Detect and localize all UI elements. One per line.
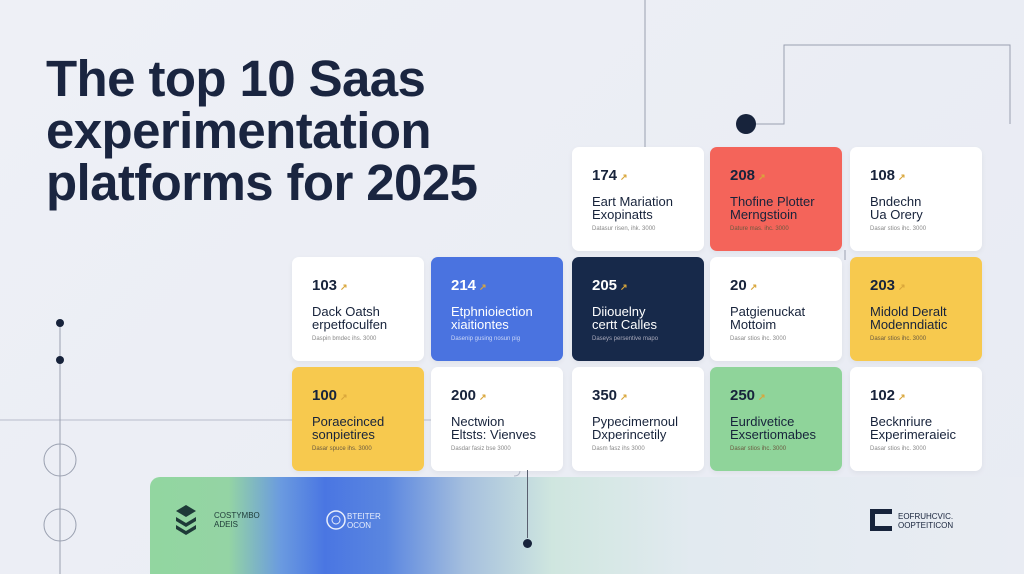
card 205: Diiouelny xyxy=(592,304,645,319)
card 102: 102 ↗ xyxy=(870,387,906,404)
card 200: Nectwion xyxy=(451,414,504,429)
card 100: 100 ↗ xyxy=(312,387,348,404)
card 20: Mottoim xyxy=(730,317,776,332)
card 350 xyxy=(572,367,704,471)
logo 1: ADEIS xyxy=(214,520,238,529)
connector dot xyxy=(527,470,528,538)
logo 1 xyxy=(176,505,260,535)
card 205: certt Calles xyxy=(592,317,657,332)
card 100: Dasar spuce ihs. 3000 xyxy=(312,446,372,452)
logo 2: BTEITER xyxy=(347,512,381,521)
card 108: Bndechn xyxy=(870,194,921,209)
card 250: 250 ↗ xyxy=(730,387,766,404)
card 103: Dack Oatsh xyxy=(312,304,380,319)
card 103 xyxy=(292,257,424,361)
card 102 xyxy=(850,367,982,471)
card 350: Dxperincetily xyxy=(592,427,666,442)
card 108: Ua Orery xyxy=(870,207,923,222)
card 205 xyxy=(572,257,704,361)
title: The top 10 Saas xyxy=(46,50,425,107)
logo 2 xyxy=(326,510,381,530)
card 102: Becknriure xyxy=(870,414,932,429)
card 250: Eurdivetice xyxy=(730,414,794,429)
logo 2: OCON xyxy=(347,521,371,530)
card 250 xyxy=(710,367,842,471)
card 350: Pypecimernoul xyxy=(592,414,678,429)
card 205: 205 ↗ xyxy=(592,277,628,294)
card 103: 103 ↗ xyxy=(312,277,348,294)
title xyxy=(46,50,477,211)
card 214: Dasenip gusing nosun pig xyxy=(451,336,520,342)
card 200 xyxy=(431,367,563,471)
card 203: Dasar stios ihc. 3000 xyxy=(870,336,926,342)
card 174 xyxy=(572,147,704,251)
card 205: Daseys persentive mapo xyxy=(592,336,658,342)
card 108 xyxy=(850,147,982,251)
card 100: Poraecinced xyxy=(312,414,384,429)
card 103: erpetfoculfen xyxy=(312,317,387,332)
logo 3: EOFRUHCVIC. xyxy=(898,512,953,521)
card 208: Merngstioin xyxy=(730,207,797,222)
card 20 xyxy=(710,257,842,361)
card 203: Midold Deralt xyxy=(870,304,947,319)
footer band xyxy=(150,477,1024,574)
card 250: Dasar stios ihc. 3000 xyxy=(730,446,786,452)
card 108: Dasar stios ihc. 3000 xyxy=(870,226,926,232)
card 208: Dature mas. ihc. 3000 xyxy=(730,226,789,232)
card 174: Eart Mariation xyxy=(592,194,673,209)
card 208 xyxy=(710,147,842,251)
card 350: 350 ↗ xyxy=(592,387,628,404)
card 174: 174 ↗ xyxy=(592,167,628,184)
card 20: Patgienuckat xyxy=(730,304,805,319)
card 250: Exsertiomabes xyxy=(730,427,816,442)
card 100 xyxy=(292,367,424,471)
card 108: 108 ↗ xyxy=(870,167,906,184)
card 200: 200 ↗ xyxy=(451,387,487,404)
card 100: sonpietires xyxy=(312,427,375,442)
card 208: Thofine Plotter xyxy=(730,194,815,209)
card 214: xiaitiontes xyxy=(451,317,509,332)
card 102: Experimeraieic xyxy=(870,427,956,442)
card 214: Etphnioiection xyxy=(451,304,533,319)
card 203: 203 ↗ xyxy=(870,277,906,294)
logo 1: COSTYMBO xyxy=(214,511,260,520)
card 350: Dasm fasz ihs 3000 xyxy=(592,446,645,452)
card 214: 214 ↗ xyxy=(451,277,487,294)
card 203 xyxy=(850,257,982,361)
card 174: Datasur risen, ihk. 3000 xyxy=(592,226,655,232)
card 174: Exopinatts xyxy=(592,207,653,222)
card 214 xyxy=(431,257,563,361)
title: platforms for 2025 xyxy=(46,154,477,211)
card 20: Dasar stios ihc. 3000 xyxy=(730,336,786,342)
card 203: Modenndiatic xyxy=(870,317,947,332)
card 102: Dasar stios ihc. 3000 xyxy=(870,446,926,452)
card 20: 20 ↗ xyxy=(730,277,757,294)
card 103: Daspin bmdec ihs. 3000 xyxy=(312,336,376,342)
card 200: Dasdar fasiz bse 3000 xyxy=(451,446,511,452)
card 208: 208 ↗ xyxy=(730,167,766,184)
logo 3 xyxy=(870,509,953,531)
card 200: Eltsts: Vienves xyxy=(451,427,536,442)
title: experimentation xyxy=(46,102,431,159)
logo 3: OOPTEITICON xyxy=(898,521,953,530)
